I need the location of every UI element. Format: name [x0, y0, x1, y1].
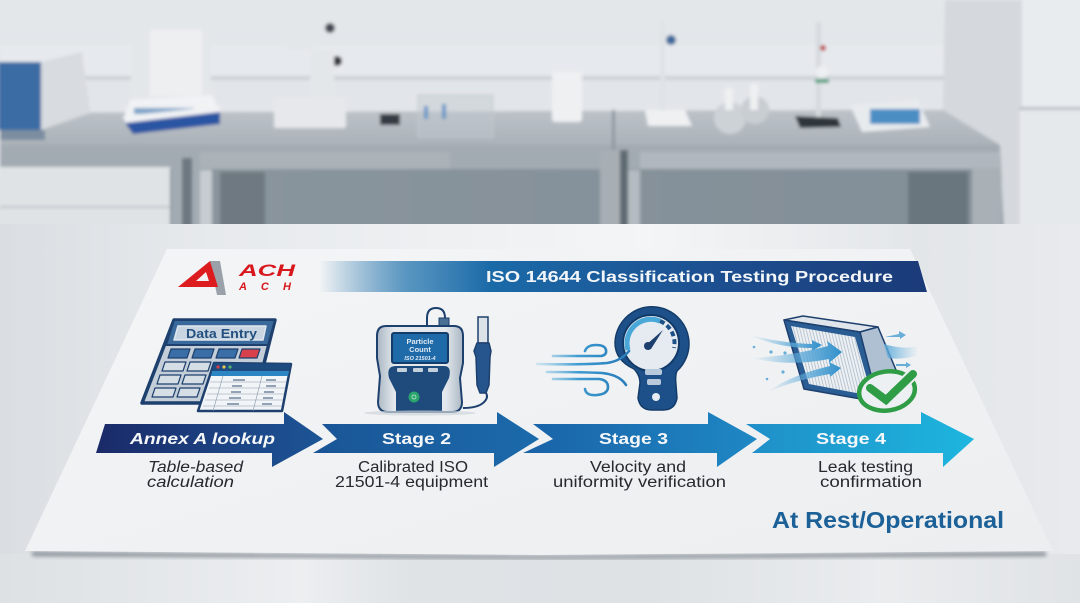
- icon: airflow velocity meter: [537, 307, 689, 410]
- arrow: Stage 4: Stage 4: [816, 431, 886, 448]
- title banner: ISO 14644 Classification Testing Procedure: [486, 269, 893, 286]
- arrow: Annex A lookup: Annex A lookup: [129, 431, 275, 448]
- laboratory bench: [0, 110, 1004, 230]
- arrow: Stage 3: [523, 412, 757, 467]
- caption: stage 4: Leak testing: [818, 459, 913, 476]
- balance: [123, 26, 220, 134]
- paper shadow: [32, 552, 1046, 559]
- caption: stage 3: [553, 459, 726, 491]
- caption: stage 2: Calibrated ISO: [358, 459, 468, 476]
- icon: particle counter: [364, 308, 491, 416]
- blue instrument: [0, 52, 90, 140]
- logo text: A C H: [238, 281, 292, 293]
- caption: stage 1: Table-based: [148, 459, 245, 476]
- caption: stage 4: [818, 459, 922, 491]
- icon: particle counter: Count: [409, 345, 431, 354]
- caption: stage 2: 21501-4 equipment: [335, 474, 489, 491]
- arrow: Annex A lookup: [96, 412, 323, 467]
- background: blurred laboratory: [0, 0, 1080, 230]
- icon: calculator with data table: Data Entry: [186, 327, 257, 341]
- logo: [178, 261, 297, 295]
- arrow: Stage 4: [746, 412, 974, 467]
- title banner: [320, 261, 927, 292]
- caption: stage 1: calculation: [147, 474, 234, 491]
- logo text: ACH: [237, 262, 297, 280]
- icon: calculator with data table: [142, 320, 291, 411]
- caption: stage 1: [147, 459, 245, 491]
- icon: HEPA filter with check: [750, 316, 918, 414]
- logo text: [237, 262, 297, 293]
- arrow: Stage 3: Stage 3: [599, 431, 668, 448]
- icon: particle counter: ISO 21501-4: [404, 356, 436, 362]
- desk surface: [0, 224, 1080, 554]
- arrow: Stage 2: Stage 2: [382, 431, 451, 448]
- right wall and cabinet: [943, 0, 1030, 230]
- caption: stage 3: Velocity and: [590, 459, 686, 476]
- arrow: Stage 2: [313, 412, 539, 467]
- glassware: [380, 95, 493, 137]
- caption: stage 2: [335, 459, 489, 491]
- poster sheet: [25, 249, 1053, 555]
- caption: stage 3: uniformity verification: [553, 474, 726, 491]
- caption: stage 4: confirmation: [820, 474, 922, 491]
- label: At Rest/Operational: At Rest/Operational: [772, 507, 1004, 533]
- bottle and stands: [552, 22, 930, 134]
- icon: particle counter: Particle: [406, 337, 434, 346]
- stand instrument: [274, 0, 346, 128]
